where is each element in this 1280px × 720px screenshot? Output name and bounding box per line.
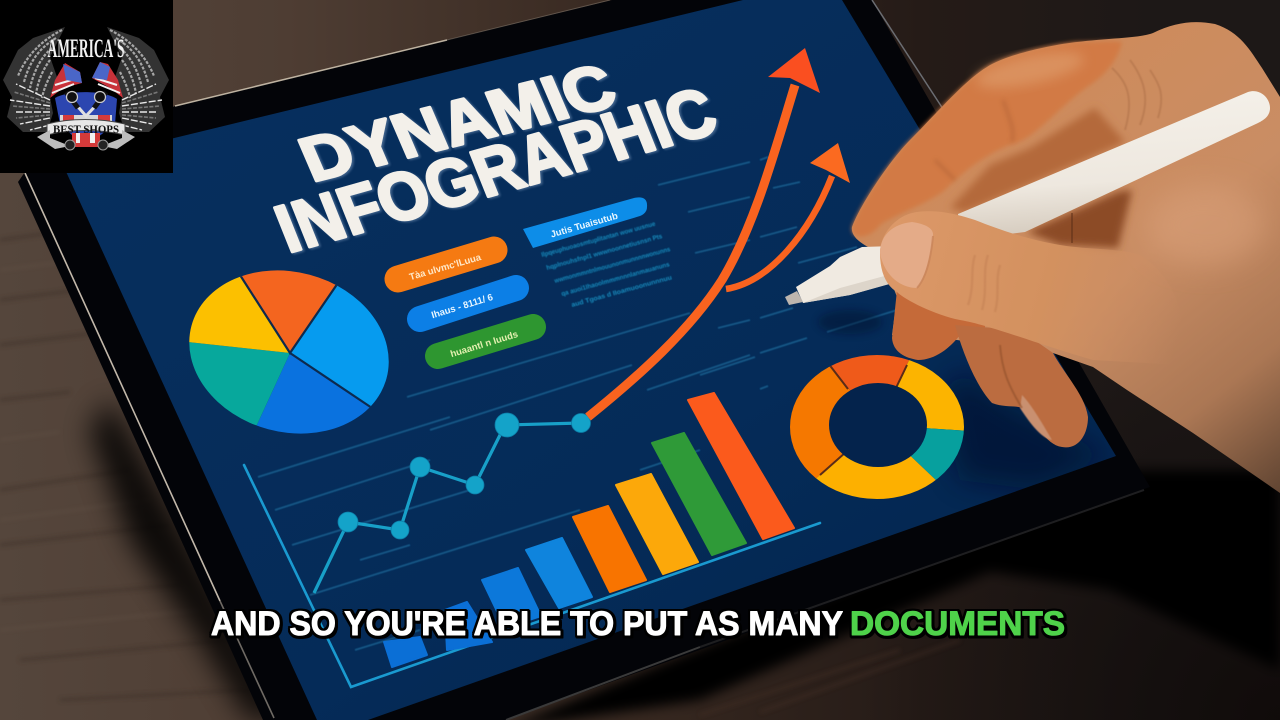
stylus pen lower barrel and tip — [785, 246, 895, 305]
logo wordmark top: AMERICA'S — [48, 34, 124, 63]
caption white text: AND SO YOU'RE ABLE TO PUT AS MANY — [211, 605, 843, 643]
chart grid lines — [258, 157, 897, 650]
logo flags — [50, 62, 123, 98]
caption highlighted word: DOCUMENTS — [850, 605, 1065, 643]
thumbnail — [880, 222, 933, 288]
knuckle texture on thumb — [968, 255, 1000, 312]
index finger highlight — [973, 45, 1087, 95]
label pill: green — [438, 327, 533, 360]
paragraph text block: aud Tgoas d IIoamuoonunnnuu — [571, 274, 673, 309]
stylus pen upper barrel — [958, 91, 1270, 240]
logo left wing — [3, 27, 65, 132]
paragraph text block — [541, 221, 673, 309]
logo wordmark bottom: BEST SHOPS — [53, 124, 119, 136]
palm silhouette — [852, 22, 1280, 493]
data point markers — [338, 413, 590, 539]
shadow of tablet on table, right — [500, 470, 1280, 720]
title: Dynamic Infographic — [265, 51, 727, 267]
thumb — [880, 211, 1184, 365]
bar chart — [384, 393, 794, 667]
crease between index finger joints — [935, 100, 1013, 180]
paragraph text block: wwmonmmntnlmouunonmunnnnwonunns — [553, 246, 671, 285]
logo banner — [37, 120, 135, 150]
label pill: blue: Ihaus - 8111/ 6 — [430, 292, 494, 321]
line chart axes — [244, 465, 820, 687]
paragraph text block: qa auoi1Ihaoolmmmnnnlanmauanuns — [561, 261, 671, 298]
pie chart — [189, 270, 389, 434]
palm highlight — [1145, 185, 1265, 265]
fingernail lower finger — [1020, 395, 1052, 440]
shadow below pen — [1027, 190, 1132, 248]
index finger — [852, 41, 1122, 237]
paragraph text block: hqplnouhsfnpl1 wwwnoonnetiusnsn Pts — [546, 233, 663, 272]
caption — [211, 605, 1065, 643]
label pill: blue — [420, 288, 516, 321]
title line one: DYNAMIC — [289, 51, 626, 195]
growth arrow: main — [588, 48, 820, 417]
label pill: top blue heading — [523, 197, 647, 248]
label pill: orange: Tàa ulvmc'lLuua — [408, 252, 483, 283]
donut chart — [790, 355, 964, 499]
label pill: green: huaantl n Iuuds — [449, 329, 519, 360]
logo right wing — [107, 27, 169, 132]
shadow of tablet on table, left — [90, 400, 290, 720]
paragraph text block: Ilpqeuphuoaosmtuplitantan wow uusnue — [541, 221, 657, 259]
middle finger — [892, 290, 985, 360]
shadow under index finger — [950, 108, 1125, 212]
logo: America's Best Shops — [0, 0, 173, 173]
ring and little fingers — [955, 325, 1088, 447]
line chart — [314, 413, 590, 593]
label pill: top blue heading: Jutis Tuaisutub — [549, 211, 619, 240]
hand — [785, 22, 1280, 493]
growth arrow: secondary — [726, 143, 850, 289]
logo shield — [55, 92, 117, 147]
title line two: INFOGRAPHIC — [265, 74, 727, 267]
knuckle wrinkles — [1112, 60, 1161, 130]
